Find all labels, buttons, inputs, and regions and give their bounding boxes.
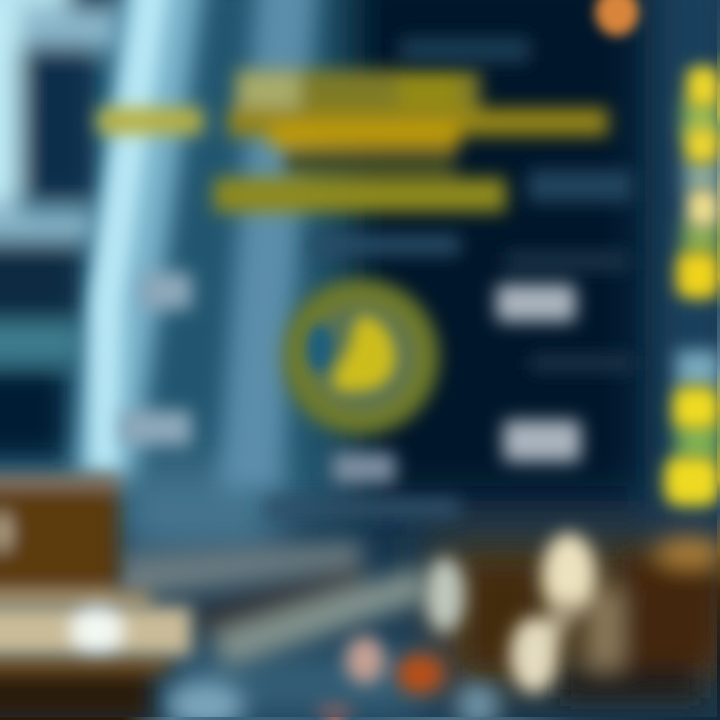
cream highlights — [425, 533, 596, 693]
title — [97, 70, 608, 212]
circular chart — [297, 293, 425, 421]
cup: left — [0, 474, 170, 720]
chart ring — [297, 293, 425, 421]
light beam halo — [75, 0, 205, 480]
saucer: left — [0, 604, 192, 656]
chart yellow segment — [333, 316, 396, 392]
yellow pills — [664, 66, 720, 506]
data labels — [120, 272, 581, 484]
light beam left — [90, 0, 172, 470]
orange accent — [317, 636, 444, 717]
light beam centre — [218, 0, 318, 490]
window frames — [0, 0, 130, 456]
table rails — [115, 540, 702, 720]
cups: right — [470, 538, 720, 698]
right edge strip — [717, 0, 720, 720]
text block: captions — [265, 38, 635, 518]
chart blue segment — [307, 324, 333, 372]
green and blue separators — [676, 100, 720, 461]
orange badge — [595, 0, 639, 36]
right column pills — [664, 66, 720, 506]
bottom edge strip — [0, 717, 720, 720]
